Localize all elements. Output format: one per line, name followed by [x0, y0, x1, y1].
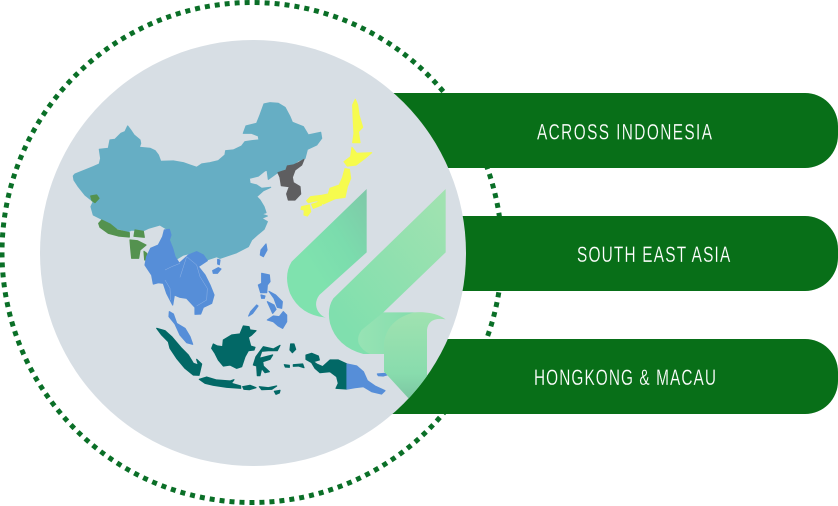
map region: Papua Indonesia	[306, 353, 347, 389]
map region: Borneo	[212, 326, 256, 368]
logo ribbon: centre	[329, 189, 446, 354]
grey disc	[40, 40, 466, 466]
map: south east asia	[145, 229, 408, 394]
map region: Philippines	[249, 273, 287, 328]
label: south east asia: SOUTH EAST ASIA	[577, 243, 731, 268]
map region: China	[73, 103, 322, 260]
map region: mainland south east asia	[145, 229, 214, 314]
map region: New Britain and Solomon	[377, 369, 408, 378]
logo fold	[358, 312, 423, 354]
map region: Sulawesi	[253, 345, 280, 376]
map region: Sumatra	[157, 328, 202, 375]
pill: south east asia	[440, 216, 838, 291]
map region: South Asia	[91, 195, 147, 260]
logo ribbon: lower right	[384, 312, 446, 400]
pill: hongkong and macau	[380, 339, 838, 414]
map region: Papua New Guinea	[347, 364, 385, 394]
label: across indonesia: ACROSS INDONESIA	[537, 121, 712, 145]
map region: Maluku	[284, 344, 304, 368]
map: north and east asia	[73, 99, 372, 260]
logo	[287, 189, 446, 400]
map region: Korea	[278, 159, 304, 200]
map region: Malay Peninsula	[169, 312, 193, 344]
pill: across indonesia	[380, 93, 838, 168]
logo ribbon: left	[287, 189, 367, 318]
label: hongkong and macau: HONGKONG & MACAU	[534, 366, 716, 391]
map borders: mainland south east asia	[165, 257, 207, 306]
map region: Japan	[301, 99, 372, 216]
map region: Taiwan	[260, 244, 267, 257]
map region: Hainan and Vietnam coast detail	[213, 259, 221, 273]
map region: Java and Lesser Sunda	[199, 377, 280, 394]
dotted ring	[2, 2, 502, 502]
